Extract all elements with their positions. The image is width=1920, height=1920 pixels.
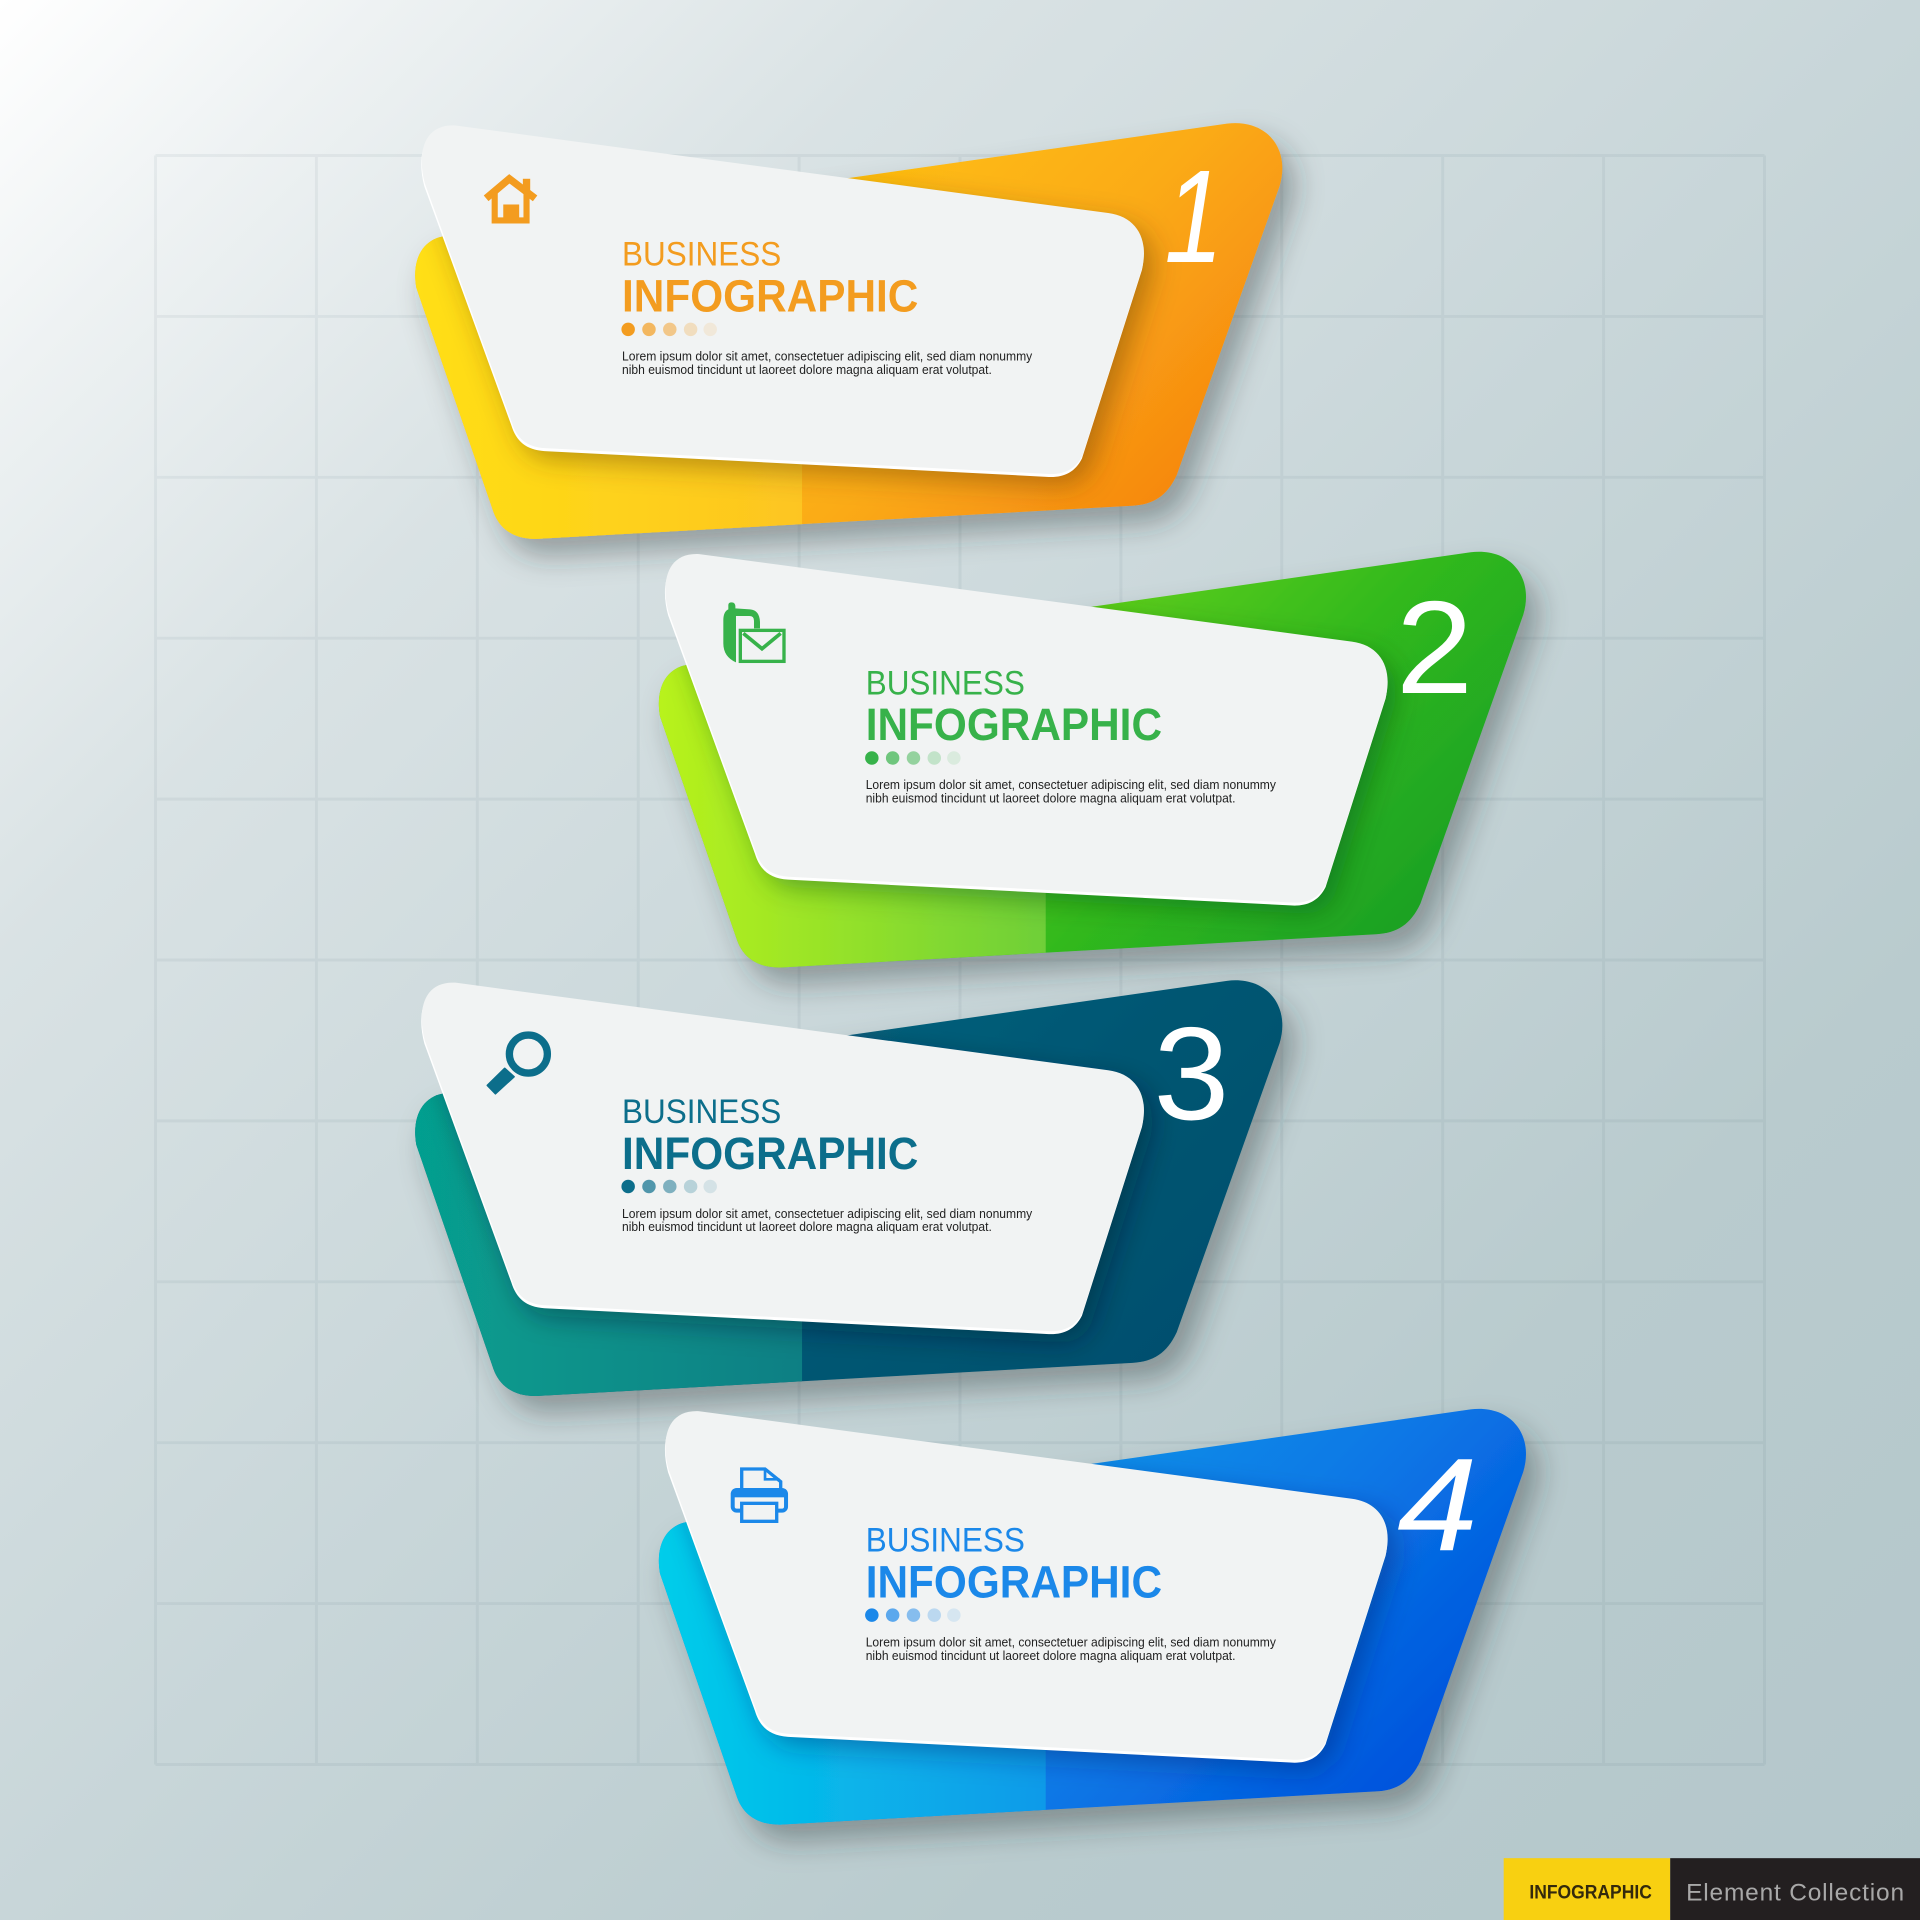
panel: step 4	[659, 1409, 1526, 1825]
front card shadow 2	[674, 565, 1396, 914]
front card shadow 4	[674, 1422, 1396, 1771]
panel: step 3	[415, 980, 1282, 1396]
number 1: 1	[1164, 143, 1223, 291]
body text: Lorem ipsum dolor sit amet, consectetuer adipiscing elit, sed diam nonummy	[866, 1635, 1277, 1649]
dots	[621, 1180, 717, 1193]
heading: infographic: INFOGRAPHIC	[866, 1556, 1162, 1607]
panel: step 1	[415, 123, 1282, 539]
footer dark block	[1670, 1858, 1920, 1920]
number 2: 2	[1396, 574, 1473, 722]
body text: nibh euismod tincidunt ut laoreet dolore magna aliquam erat volutpat.	[622, 1220, 992, 1234]
footer yellow block	[1504, 1858, 1670, 1920]
body text: nibh euismod tincidunt ut laoreet dolore magna aliquam erat volutpat.	[866, 1649, 1236, 1663]
heading: infographic: INFOGRAPHIC	[622, 1128, 918, 1179]
dots	[865, 1608, 961, 1622]
body text: nibh euismod tincidunt ut laoreet dolore magna aliquam erat volutpat.	[866, 792, 1236, 806]
background grid	[156, 156, 1764, 1764]
white card 2	[665, 554, 1388, 906]
colored back shape 2	[659, 552, 1526, 967]
icon: phone and mail	[723, 602, 784, 662]
front card shadow 3	[430, 994, 1153, 1342]
front card shadow 1	[430, 136, 1153, 485]
body text: Lorem ipsum dolor sit amet, consectetuer adipiscing elit, sed diam nonummy	[622, 350, 1033, 364]
icon: magnifier	[487, 1035, 547, 1094]
number 3: 3	[1153, 1000, 1229, 1148]
white card 1	[421, 125, 1144, 477]
footer label: element collection: Element Collection	[1686, 1879, 1904, 1906]
dots	[865, 751, 961, 765]
heading: business: BUSINESS	[622, 1093, 781, 1131]
body text: Lorem ipsum dolor sit amet, consectetuer adipiscing elit, sed diam nonummy	[866, 778, 1277, 792]
colored back shape 3	[415, 980, 1282, 1396]
white card 3	[421, 983, 1144, 1334]
colored back shape 1	[415, 123, 1282, 539]
footer label: infographic: INFOGRAPHIC	[1529, 1883, 1652, 1904]
heading: business: BUSINESS	[622, 236, 781, 274]
footer tag	[1504, 1858, 1920, 1920]
body text: Lorem ipsum dolor sit amet, consectetuer adipiscing elit, sed diam nonummy	[622, 1207, 1033, 1221]
dots	[621, 323, 717, 336]
colored back shape 4	[659, 1409, 1526, 1825]
panel: step 2	[659, 552, 1526, 967]
heading: business: BUSINESS	[866, 664, 1025, 702]
heading: business: BUSINESS	[866, 1521, 1025, 1559]
heading: infographic: INFOGRAPHIC	[866, 699, 1162, 750]
icon: house	[486, 179, 535, 220]
heading: infographic: INFOGRAPHIC	[622, 271, 918, 322]
icon: printer	[733, 1469, 786, 1521]
body text: nibh euismod tincidunt ut laoreet dolore magna aliquam erat volutpat.	[622, 363, 992, 377]
white card 4	[665, 1411, 1388, 1763]
number 4: 4	[1397, 1431, 1478, 1579]
